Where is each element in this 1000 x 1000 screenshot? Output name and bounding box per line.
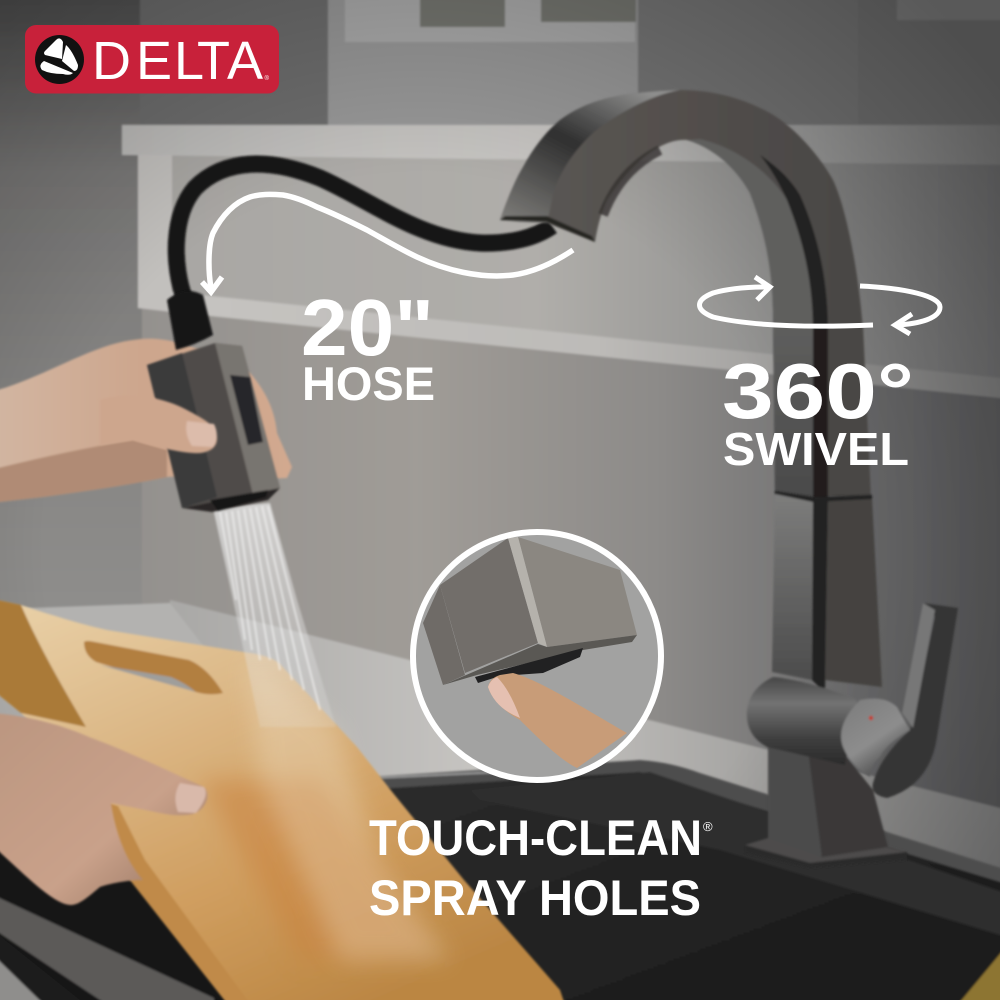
spout outlet [500, 216, 595, 242]
upper body [772, 493, 813, 680]
logo emblem [35, 35, 84, 84]
label: 360 degree swivel [722, 347, 914, 475]
cylinder [747, 677, 857, 765]
front band of arc [500, 90, 863, 330]
inner lit face [687, 139, 813, 330]
callout circle: spray holes detail [413, 532, 661, 780]
label: touch-clean spray holes [369, 810, 713, 926]
fingertip [488, 673, 627, 768]
inner dark stripe [603, 150, 660, 215]
thumb on spray head [100, 395, 217, 453]
board handle cutout [84, 641, 223, 694]
hose length arrow [202, 194, 573, 292]
pull-down spray head [147, 343, 280, 512]
hose collar [167, 291, 213, 350]
dial [841, 699, 910, 777]
upper hand [0, 339, 292, 503]
hose word: HOSE [302, 357, 435, 410]
temperature dot [869, 716, 873, 720]
line two: SPRAY HOLES [369, 870, 701, 926]
handle lever [873, 603, 958, 798]
line one: TOUCH-CLEAN [369, 810, 702, 866]
arm below the arc [773, 325, 871, 498]
swivel rotation arrows [700, 277, 940, 334]
spray head close-up [423, 537, 637, 685]
water spray [213, 503, 336, 727]
swivel number: 360° [722, 347, 914, 435]
water splash on board [246, 657, 450, 960]
sink basin [0, 760, 1000, 1000]
lower hand [0, 713, 208, 905]
inner dark channel [760, 155, 828, 330]
swivel word: SWIVEL [723, 423, 909, 475]
Delta logo badge [25, 25, 279, 94]
side face of arc [500, 90, 680, 223]
registered mark: ® [264, 75, 270, 82]
wordmark DELTA: DELTA [92, 31, 263, 91]
lower body [768, 740, 822, 857]
hose number: 20" [301, 283, 434, 372]
label: 20 inch hose [301, 283, 435, 410]
faucet spout [500, 90, 871, 500]
registered mark: ® [703, 819, 713, 834]
cutting board [0, 596, 570, 1000]
braided hose [176, 164, 552, 300]
base plate [745, 838, 907, 863]
faucet base [745, 491, 958, 868]
